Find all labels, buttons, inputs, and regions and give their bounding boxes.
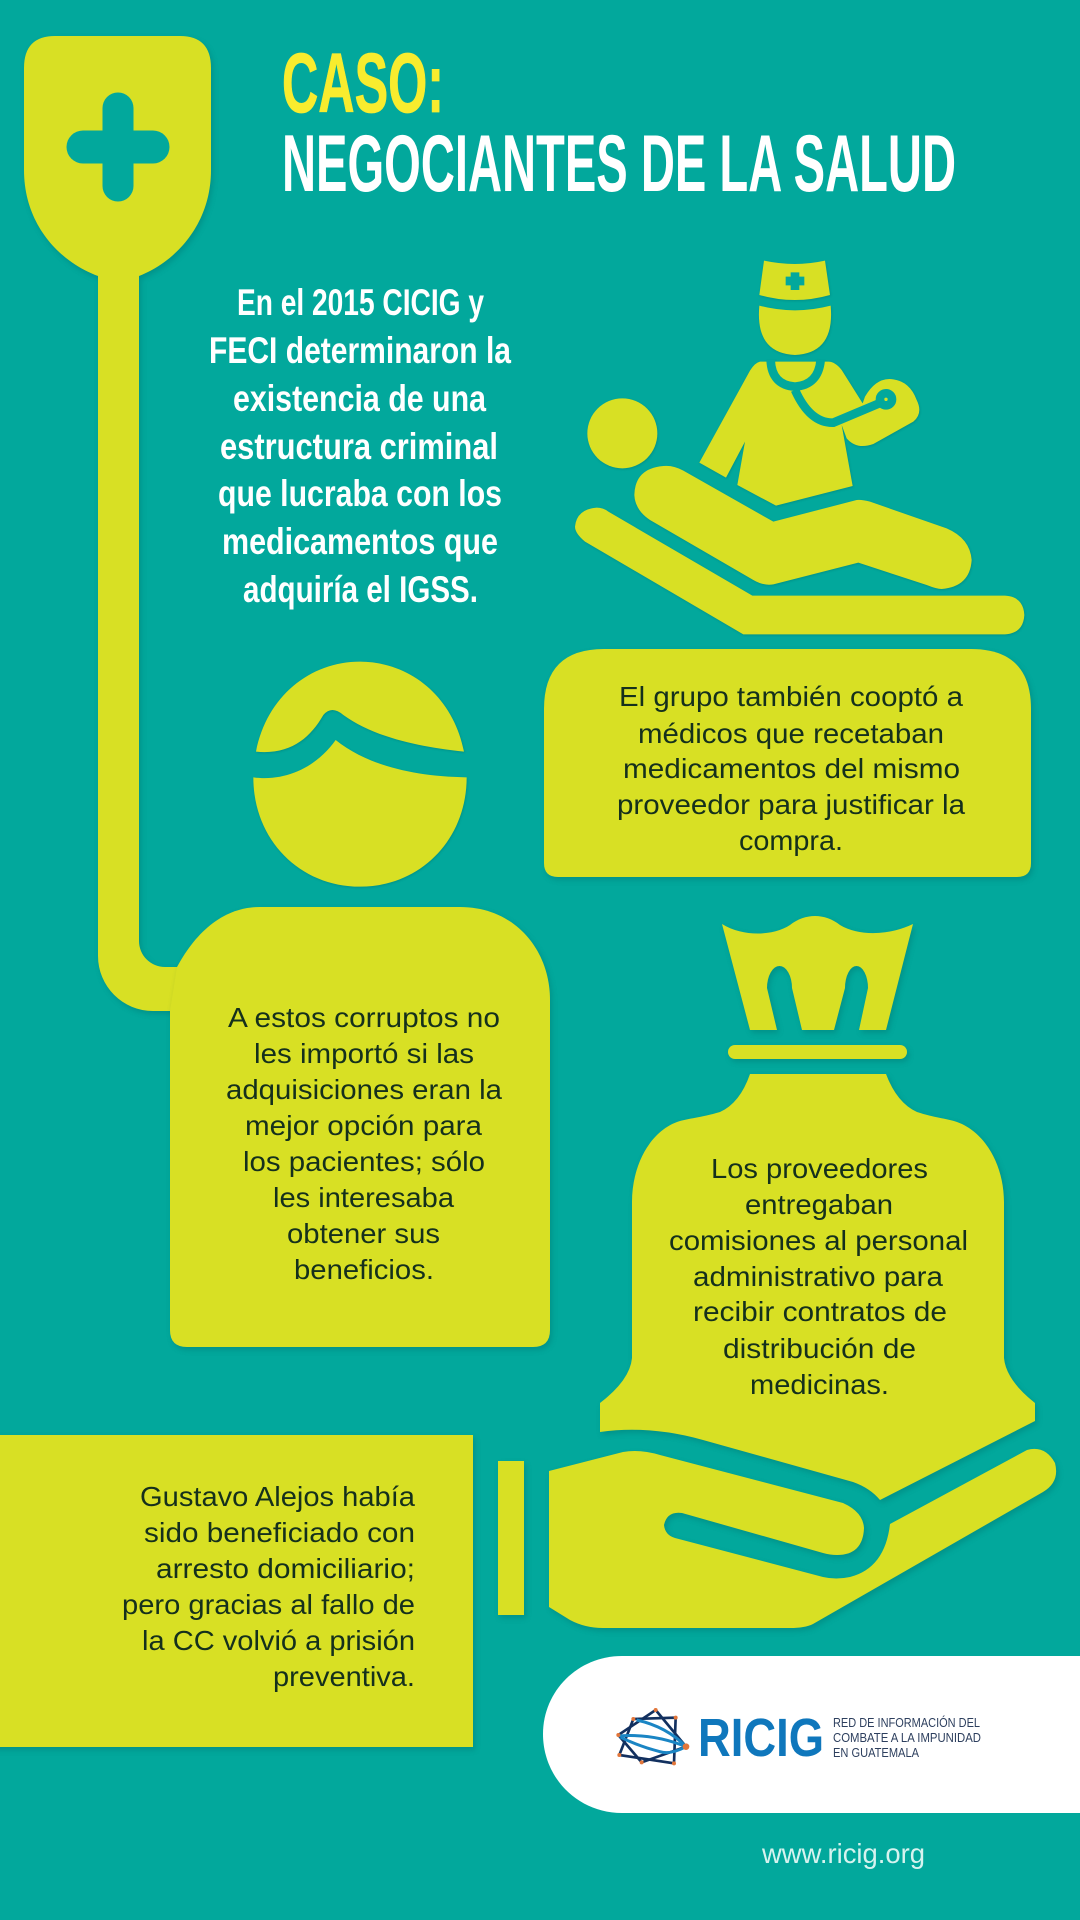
panel text: les importó si las	[254, 1038, 474, 1069]
panel: Gustavo Alejos	[0, 1435, 473, 1747]
bed	[575, 508, 1024, 634]
logo tagline	[833, 1715, 981, 1760]
icon: IV bag with tube	[24, 36, 211, 1011]
intro text	[209, 282, 511, 610]
intro text: En el 2015 CICIG y	[237, 282, 484, 323]
bag text: entregaban	[745, 1189, 893, 1220]
bag text: medicinas.	[750, 1369, 889, 1400]
panel text: proveedor para justificar la	[617, 789, 966, 820]
panel text: mejor opción para	[245, 1110, 483, 1141]
patient head	[587, 398, 657, 468]
panel text: arresto domiciliario;	[156, 1553, 415, 1584]
panel text	[226, 1002, 503, 1285]
panel text: preventiva.	[273, 1661, 415, 1692]
icon: RICIG star logo	[616, 1708, 689, 1765]
panel text: obtener sus	[287, 1218, 440, 1249]
intro text: existencia de una	[233, 378, 486, 419]
title: CASO:	[282, 36, 444, 130]
stethoscope	[771, 360, 892, 423]
panel text: pero gracias al fallo de	[122, 1589, 415, 1620]
panel text: A estos corruptos no	[228, 1002, 500, 1033]
intro text: que lucraba con los	[218, 473, 502, 514]
intro text: estructura criminal	[220, 426, 498, 467]
panel: person body	[170, 907, 550, 1347]
panel text: compra.	[739, 825, 843, 856]
bag text	[669, 1153, 968, 1400]
panel text: medicamentos del mismo	[623, 753, 960, 784]
bag text: recibir contratos de	[693, 1296, 947, 1327]
panel text: adquisiciones eran la	[226, 1074, 503, 1105]
panel: doctors co-opted	[544, 649, 1031, 877]
icon: doctor and patient on bed	[575, 261, 1024, 634]
doctor head	[759, 306, 831, 355]
panel text	[122, 1481, 416, 1692]
panel: RICIG logo pill	[543, 1656, 1080, 1813]
bag crown	[722, 916, 913, 1030]
title	[282, 36, 956, 209]
hat cross	[786, 272, 804, 290]
icon: money bag	[600, 916, 1035, 1500]
logo wordmark: RICIG	[698, 1708, 824, 1768]
bag body	[600, 1074, 1035, 1500]
panel text: beneficios.	[294, 1254, 434, 1285]
panel text: la CC volvió a prisión	[142, 1625, 415, 1656]
bag text: administrativo para	[693, 1261, 944, 1292]
panel text: Gustavo Alejos había	[140, 1481, 416, 1512]
doctor hat	[759, 261, 830, 300]
bag text: comisiones al personal	[669, 1225, 968, 1256]
panel text: médicos que recetaban	[638, 718, 944, 749]
bag text: distribución de	[723, 1333, 916, 1364]
intro text: FECI determinaron la	[209, 330, 511, 371]
logo tagline: RED DE INFORMACIÓN DEL	[833, 1715, 980, 1730]
icon: person head	[253, 662, 467, 887]
logo tagline: COMBATE A LA IMPUNIDAD	[833, 1730, 981, 1745]
panel text: les interesaba	[273, 1182, 455, 1213]
panel text: sido beneficiado con	[144, 1517, 415, 1548]
patient body	[634, 466, 972, 589]
website url: www.ricig.org	[761, 1838, 925, 1869]
panel text: El grupo también cooptó a	[619, 681, 964, 712]
panel text: los pacientes; sólo	[243, 1146, 485, 1177]
logo tagline: EN GUATEMALA	[833, 1745, 919, 1760]
doctor torso and arm	[699, 362, 919, 506]
intro text: adquiría el IGSS.	[243, 569, 478, 610]
icon: open hand with cuff	[498, 1449, 1056, 1628]
intro text: medicamentos que	[222, 521, 498, 562]
bag text: Los proveedores	[711, 1153, 928, 1184]
bag tie	[728, 1045, 907, 1059]
panel text	[617, 681, 966, 856]
